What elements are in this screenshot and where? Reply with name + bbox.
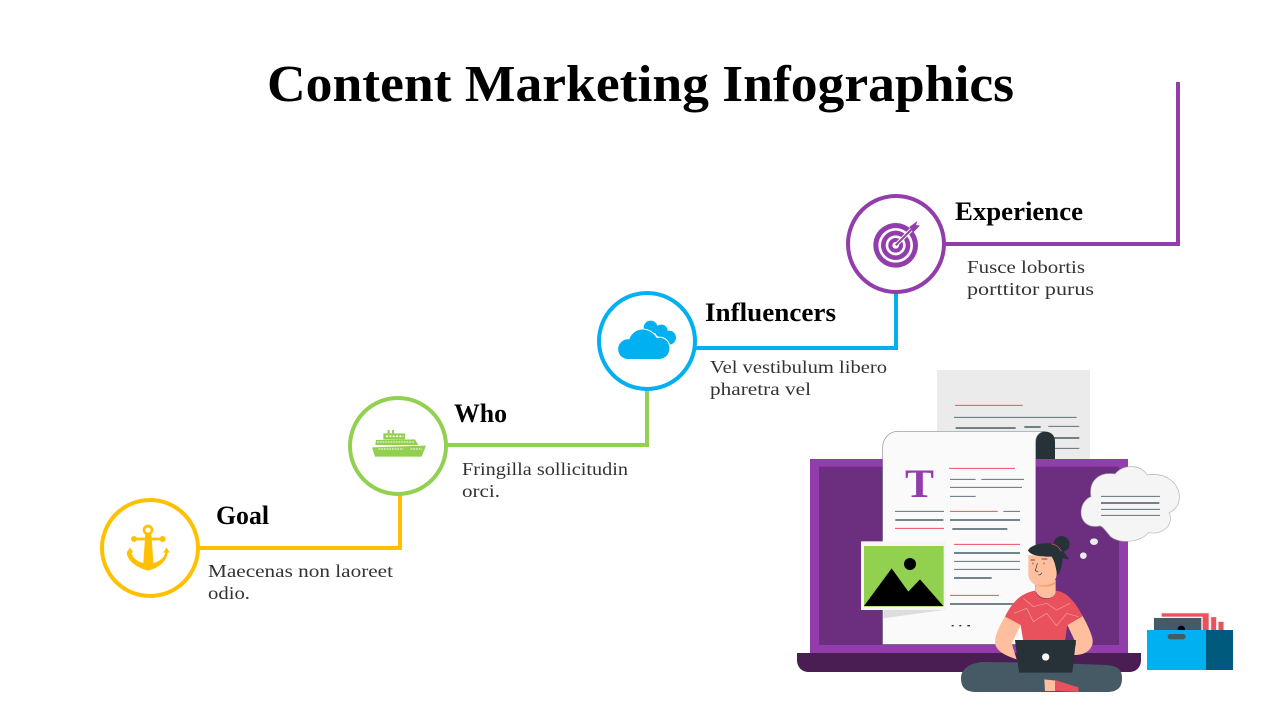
illustration: person working with laptop and documents (797, 370, 1233, 692)
heading: Experience: Experience (955, 197, 1083, 226)
document (883, 431, 1055, 644)
text: Who description: orci. (462, 481, 500, 501)
connector: green step (447, 390, 647, 445)
image card (861, 541, 946, 618)
person (961, 536, 1122, 692)
circle: Experience (848, 196, 944, 292)
text: Goal description: odio. (208, 583, 250, 603)
connector: yellow step (200, 495, 400, 548)
legs (961, 662, 1122, 692)
circle: Influencers (599, 293, 695, 389)
heading: Who: Who (454, 399, 507, 428)
icon: clouds (618, 321, 676, 359)
face (1028, 555, 1057, 587)
title: Content Marketing Infographics (267, 56, 1014, 113)
foot (1044, 679, 1056, 691)
arms (995, 617, 1021, 659)
hair (1028, 536, 1070, 576)
step: Goal (102, 500, 393, 603)
step: Influencers (599, 293, 887, 399)
letter T: T (905, 461, 934, 506)
icon: ship (372, 430, 426, 457)
thought cloud (1080, 467, 1179, 559)
shirt (1005, 591, 1083, 642)
text: Who description: Fringilla sollicitudin (462, 459, 628, 479)
text: Influencers description: Vel vestibulum libero (710, 357, 887, 377)
box of folders (1147, 613, 1233, 670)
heading: Goal: Goal (216, 501, 269, 530)
neck (1036, 580, 1056, 598)
back page (937, 370, 1090, 460)
text: Influencers description: pharetra vel (710, 379, 811, 399)
connector: blue step (696, 293, 896, 348)
small laptop (1015, 640, 1076, 673)
laptop screen (810, 459, 1128, 656)
icon: target (873, 221, 920, 268)
text: Experience description: porttitor purus (967, 279, 1094, 299)
icon: anchor (127, 526, 170, 571)
step: Who (350, 398, 628, 501)
heading: Influencers: Influencers (705, 298, 836, 327)
step: Experience (848, 196, 1094, 299)
circle: Who (350, 398, 446, 494)
circle: Goal (102, 500, 198, 596)
text: Goal description: Maecenas non laoreet (208, 561, 393, 581)
text: Experience description: Fusce lobortis (967, 257, 1085, 277)
laptop base (797, 653, 1141, 672)
connector: purple riser (945, 82, 1178, 244)
